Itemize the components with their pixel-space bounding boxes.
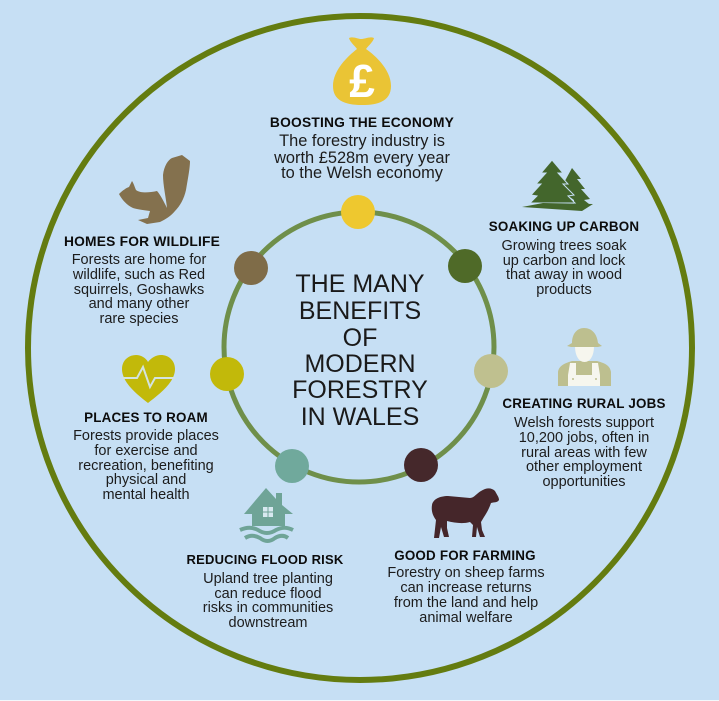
text: reducing flood risk: risks in communities [203, 600, 333, 616]
text: places to roam: mental health [102, 487, 190, 503]
text: creating rural jobs: 10,200 jobs, often in [519, 430, 649, 446]
text: boosting the economy: The forestry industry is [279, 132, 445, 150]
text: creating rural jobs: Welsh forests support [514, 415, 654, 431]
title: IN WALES [301, 403, 419, 431]
text: reducing flood risk: can reduce flood [214, 586, 322, 602]
text: homes for wildlife: and many other [89, 296, 190, 312]
text: boosting the economy: BOOSTING THE ECONOMY [270, 115, 454, 130]
text: boosting the economy: to the Welsh economy [281, 164, 444, 182]
text: soaking up carbon [489, 219, 639, 298]
text: good for farming: Forestry on sheep farms [387, 565, 545, 581]
text: soaking up carbon: up carbon and lock [503, 253, 626, 269]
text: places to roam: recreation, benefiting [78, 458, 214, 474]
text: creating rural jobs: opportunities [542, 474, 626, 490]
icon: squirrel [119, 155, 190, 224]
text: homes for wildlife: rare species [100, 311, 178, 327]
dot: flood [275, 449, 309, 483]
text: homes for wildlife: HOMES FOR WILDLIFE [64, 234, 220, 249]
icon: sheep [432, 488, 499, 538]
icon: money bag: £ [349, 55, 375, 107]
text: places to roam: for exercise and [94, 443, 198, 459]
dot: carbon [448, 249, 482, 283]
text: creating rural jobs [502, 396, 666, 490]
icon: money bag [333, 37, 391, 107]
inner ring [224, 212, 494, 482]
text: places to roam: physical and [106, 472, 186, 488]
text: boosting the economy: worth £528m every year [273, 149, 450, 167]
dot: jobs [474, 354, 508, 388]
icon: heart [122, 355, 175, 403]
title: OF [343, 324, 377, 352]
text: reducing flood risk [187, 552, 344, 631]
text: good for farming [387, 548, 545, 626]
title: MODERN [304, 350, 416, 378]
dot: roam [210, 357, 244, 391]
icon: worker [558, 328, 611, 386]
text: good for farming: animal welfare [419, 610, 513, 626]
text: homes for wildlife [64, 234, 220, 327]
text: creating rural jobs: other employment [526, 459, 642, 475]
dot: wildlife [234, 251, 268, 285]
text: homes for wildlife: squirrels, Goshawks [74, 282, 204, 298]
text: soaking up carbon: that away in wood [506, 267, 622, 283]
text: places to roam [73, 410, 219, 503]
title: BENEFITS [299, 297, 421, 325]
text: creating rural jobs: CREATING RURAL JOBS [502, 396, 666, 411]
text: soaking up carbon: products [536, 282, 592, 298]
title: THE MANY [295, 270, 425, 298]
text: boosting the economy [270, 115, 454, 182]
text: places to roam: Forests provide places [73, 428, 219, 444]
text: reducing flood risk: Upland tree planting [203, 571, 333, 587]
text: homes for wildlife: Forests are home for [72, 252, 206, 268]
text: soaking up carbon: SOAKING UP CARBON [489, 219, 639, 234]
text: good for farming: can increase returns [400, 580, 532, 596]
text: good for farming: GOOD FOR FARMING [394, 548, 536, 563]
icon: trees [522, 160, 593, 211]
text: homes for wildlife: wildlife, such as Red [72, 267, 205, 283]
text: reducing flood risk: REDUCING FLOOD RISK [187, 552, 344, 567]
icon: flooded house [240, 488, 293, 541]
text: soaking up carbon: Growing trees soak [502, 238, 627, 254]
text: reducing flood risk: downstream [229, 615, 307, 631]
title [292, 270, 428, 431]
dot: farming [404, 448, 438, 482]
title: FORESTRY [292, 376, 428, 404]
text: creating rural jobs: rural areas with few [521, 445, 647, 461]
dot: economy [341, 195, 375, 229]
text: good for farming: from the land and help [394, 595, 538, 611]
text: places to roam: PLACES TO ROAM [84, 410, 208, 425]
